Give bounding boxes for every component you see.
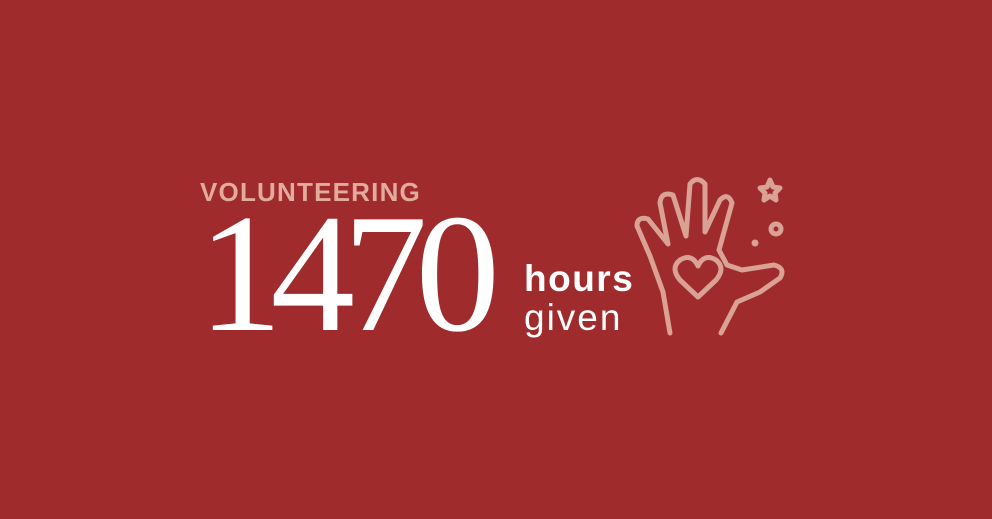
text: hours: hours [524,258,634,299]
text: given: given [524,297,622,338]
big number: 1470 [198,179,488,367]
label: volunteering: VOLUNTEERING [200,177,421,207]
